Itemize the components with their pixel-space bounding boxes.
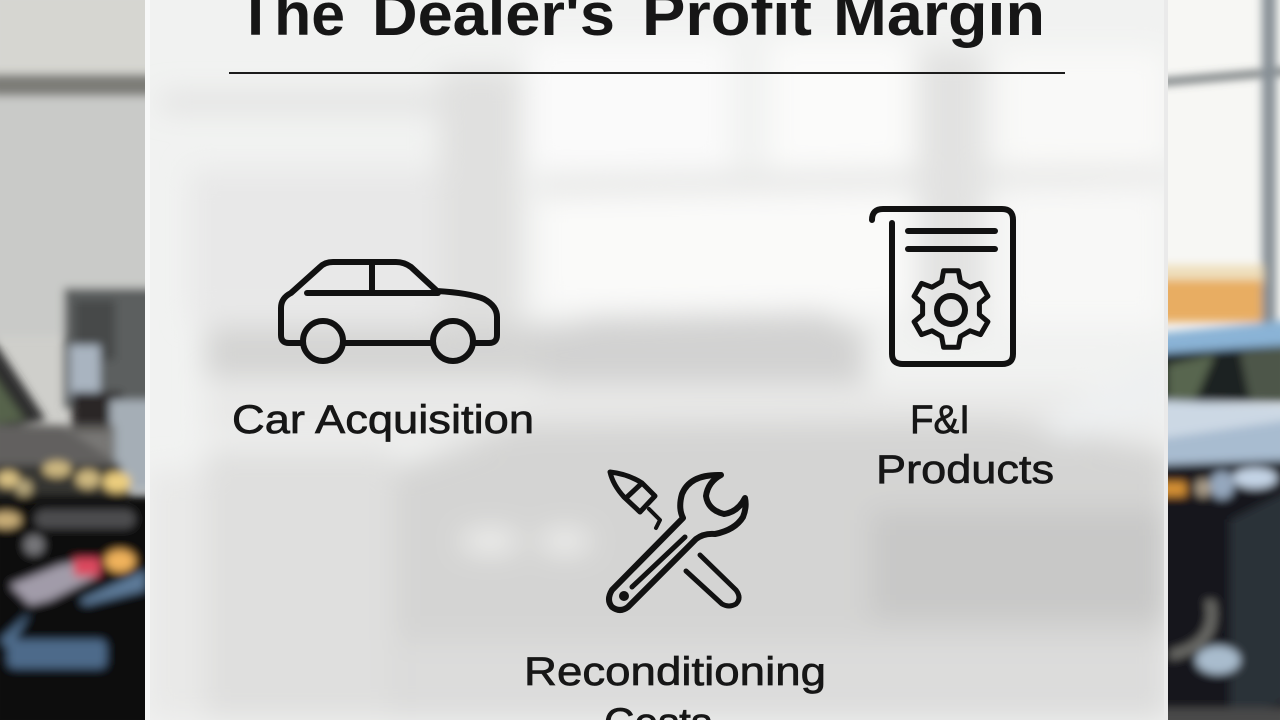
label: F&amp;I products: F&I — [910, 398, 970, 442]
title — [237, 0, 1045, 48]
background: blurred showroom right side — [1168, 0, 1280, 720]
label: F&amp;I products: Products — [876, 448, 1054, 492]
label: F&amp;I products — [876, 398, 1054, 492]
icon: car — [281, 262, 497, 361]
label: reconditioning costs: Reconditioning — [524, 650, 826, 694]
label: reconditioning costs — [524, 650, 826, 720]
icon: wrench and screwdriver — [609, 472, 746, 610]
background: blurred showroom left side — [0, 0, 145, 720]
title divider rule — [229, 72, 1065, 74]
icon: F&amp;I contract document with gear — [872, 209, 1013, 364]
label: car acquisition: Car Acquisition — [232, 398, 534, 442]
